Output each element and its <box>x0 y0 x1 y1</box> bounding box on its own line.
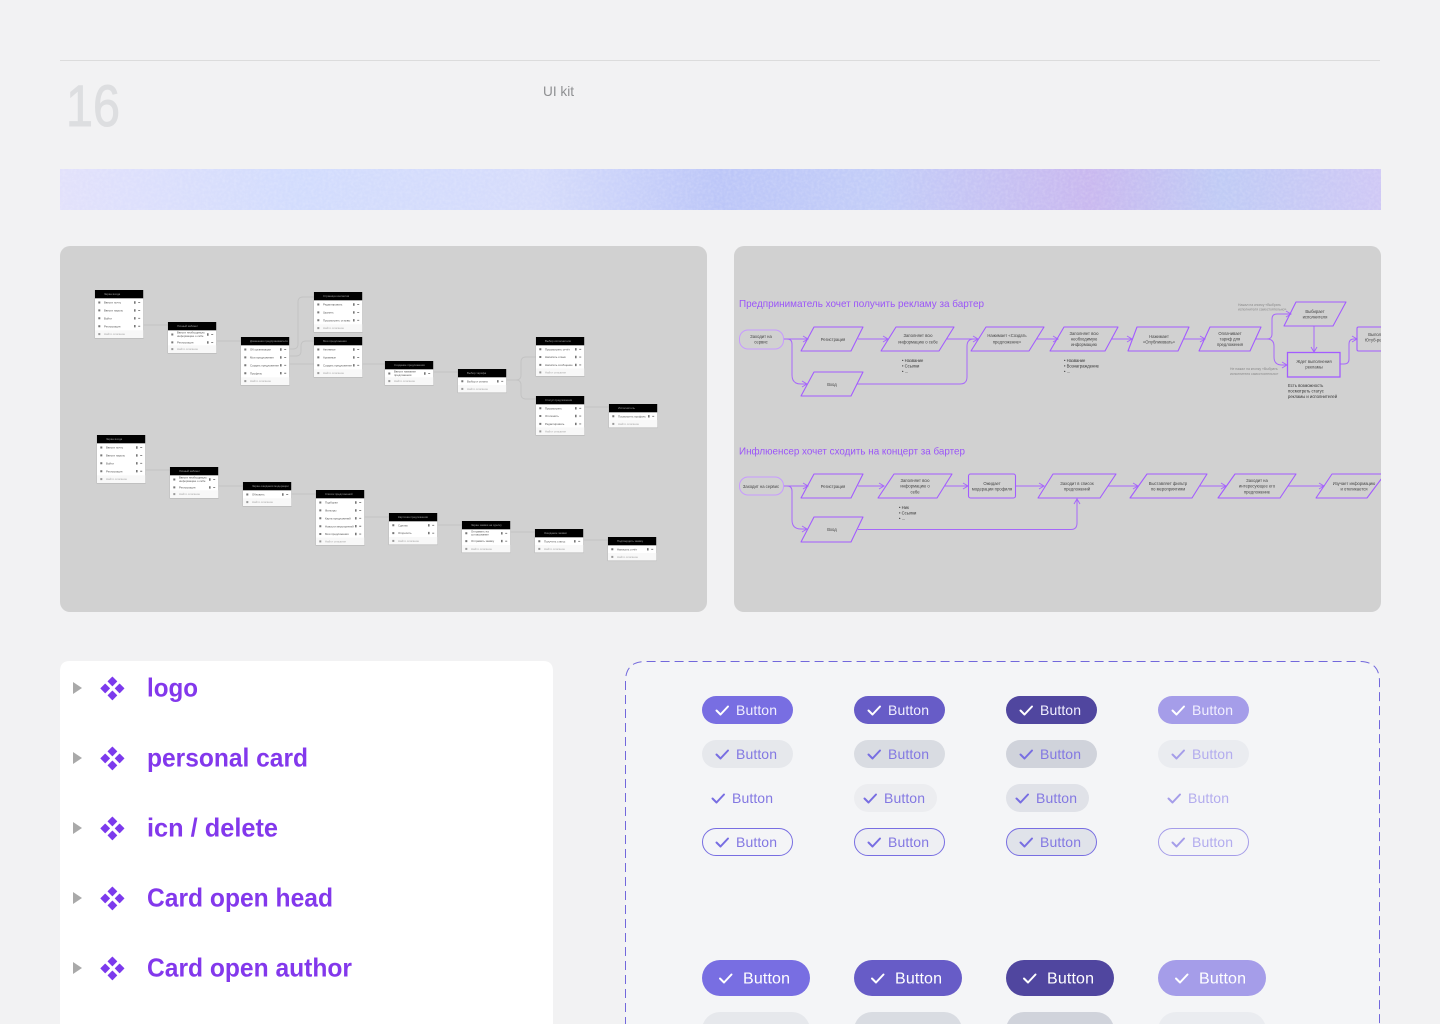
button row: filled small: Button <box>1192 702 1233 718</box>
card: login: Регистрация <box>104 324 121 328</box>
step: visits service <box>740 330 784 349</box>
step: login flow 1 <box>801 372 863 396</box>
card: login 2 <box>97 435 146 484</box>
step: interesting offer: Заходит на <box>1246 478 1268 483</box>
step: performs <box>1356 326 1381 352</box>
card: offer card <box>389 513 438 545</box>
note: required list: • ... <box>1064 369 1070 374</box>
step: interesting offer: интересующее его <box>1239 484 1276 488</box>
card: create offer: Создание предложения <box>394 363 425 367</box>
card: contractor <box>609 404 658 428</box>
button row: filled small: Button <box>1040 702 1081 718</box>
step: awaits moderation: Ожидает <box>983 481 1001 486</box>
card: login: Ввести пароль <box>104 308 124 312</box>
card: login 2: Войти <box>106 461 114 465</box>
card: tariff: Выбор и оплата <box>467 379 488 383</box>
card: offer card: Открепить <box>398 531 412 535</box>
card: personal info: Личный кабинет <box>177 324 199 328</box>
card: deal: согласование <box>471 533 489 537</box>
connectors <box>143 297 609 540</box>
note: fields list: • Название <box>902 358 924 363</box>
step: fill info <box>881 327 954 351</box>
step: wait ads <box>1288 352 1340 377</box>
note: fields list: • Ссылки <box>902 364 920 368</box>
card: my offers: Создать предложение <box>323 363 352 367</box>
card: offers list: Список предложений <box>325 492 353 496</box>
button row: filled large: Button <box>1047 970 1094 988</box>
card: business: Мои предложения <box>250 356 274 360</box>
card: personal info: информацию о себе <box>177 334 204 338</box>
step: visits service: Заходит на <box>750 334 772 339</box>
card: influencer home: Обновить <box>252 493 265 497</box>
flow title: entrepreneur: Предприниматель хочет получить рекламу за бартер <box>739 298 984 310</box>
note: fields list <box>902 359 924 373</box>
card: contractor selection: Просмотреть отчёт <box>545 347 571 351</box>
step: registration: Регистрация <box>821 337 845 342</box>
card: offer status: Отклонить <box>545 414 559 418</box>
card: login: Экран входа <box>104 292 121 296</box>
step: choose contractor: исполнителя <box>1303 314 1327 320</box>
note: required list: • Название <box>1064 358 1086 363</box>
step: fill required <box>1050 327 1118 351</box>
step: fill info: Заполняет всю <box>900 478 930 483</box>
card: my offers: Архивные <box>323 356 336 360</box>
card: personal info: Ввести необходимую <box>177 331 205 335</box>
card: my offers: Найти описание <box>323 371 344 375</box>
step: performs: Выполняет <box>1368 332 1390 337</box>
card: offers list <box>316 490 365 546</box>
card: contacts: Просмотреть отзывы <box>323 318 350 322</box>
card: personal info 2: Ввести необходимую <box>179 476 207 480</box>
card: tariff <box>458 369 507 393</box>
card: contractor selection: Выбор исполнителя <box>545 339 571 343</box>
card: offers list: Карта предложений <box>325 516 351 520</box>
note: button not pressed: Не нажал на кнопку «Выбрать <box>1230 367 1278 371</box>
step: visits service: сервис <box>754 340 768 344</box>
card: result: Подтвердить заявку <box>617 539 644 543</box>
card: create offer: предложения <box>394 373 412 377</box>
button row: tinted small: Button <box>736 746 777 762</box>
step: interesting offer: предложение <box>1244 490 1271 494</box>
step: interesting offer <box>1218 474 1296 498</box>
row: Card open head <box>73 882 333 912</box>
card: business <box>241 337 290 386</box>
card: login 2: Ввести пароль <box>106 454 126 458</box>
step: pay: тариф для <box>1220 336 1240 342</box>
card: my offers: Активные <box>323 348 336 352</box>
step: fill required: Заполняет всю <box>1069 331 1099 336</box>
card: deal: Отправить заявку <box>471 539 495 543</box>
step: filter: по мероприятиям <box>1151 486 1185 492</box>
note: required list <box>1064 359 1099 373</box>
step: visits service <box>740 477 784 495</box>
row: logo <box>73 672 198 702</box>
card: offer card: Сделка <box>398 523 408 527</box>
step: opens list: Заходит в список <box>1060 481 1094 486</box>
card: create offer <box>385 361 434 386</box>
card: my offers: Мои предложения <box>323 339 347 343</box>
step: fill info <box>878 474 952 498</box>
step: publish: «Опубликовать» <box>1143 340 1176 344</box>
card: login: Ввести почту <box>104 301 122 305</box>
card: offer status <box>536 396 585 436</box>
step: registration <box>801 327 863 351</box>
note: status: посмотреть статус <box>1288 388 1324 394</box>
button row: outline small: Button <box>1040 834 1081 850</box>
note: profile list <box>899 506 916 520</box>
step: studies info: и откликается <box>1340 486 1368 492</box>
card: contractor: Посмотреть профиль <box>618 414 646 418</box>
button row: ghost small: Button <box>884 790 925 806</box>
card: contacts: Редактировать <box>323 303 343 307</box>
row: icn / delete <box>73 812 278 842</box>
step: create offer: Нажимает «Создать <box>987 333 1027 338</box>
card: tariff: Найти описание <box>467 387 488 391</box>
card: influencer home: Найти описание <box>252 500 273 504</box>
card: personal info 2: Личный кабинет <box>179 469 201 473</box>
card: business: Найти описание <box>250 379 271 383</box>
step: publish: Нажимает <box>1149 334 1169 339</box>
card: contractor selection <box>536 337 585 377</box>
row: icn / delete: icn / delete <box>147 812 278 842</box>
step: login: Вход <box>827 527 837 532</box>
card: login: Войти <box>104 316 112 320</box>
card: personal info 2: Найти описание <box>179 492 200 496</box>
note: fields list: • ... <box>902 369 908 374</box>
note: required list: • Вознаграждение <box>1064 364 1100 368</box>
card: login 2: Экран входа <box>106 437 123 441</box>
step: pay: предложения <box>1217 342 1243 347</box>
card: contractor selection: Написать сообщение <box>545 363 573 367</box>
panel: button states <box>626 662 1380 1024</box>
panel: layers list <box>60 661 553 1024</box>
note: button not pressed: исполнителя самостоятельно» <box>1230 372 1279 376</box>
card: offer status: Статус предложения <box>545 398 573 402</box>
card: contractor selection: Найти описание <box>545 370 566 374</box>
step: fill required: информацию <box>1071 342 1097 347</box>
top divider <box>60 60 1380 61</box>
step: studies info: Изучает информацию <box>1333 481 1375 486</box>
card: offers list: Мои предложения <box>325 532 349 536</box>
step: fill info: информацию о <box>900 484 930 488</box>
button row: tinted small: Button <box>1040 746 1081 762</box>
flow title: influencer: Инфлюенсер хочет сходить на концерт за бартер <box>739 446 965 458</box>
card: result: Найти описание <box>617 555 638 559</box>
panel: user flows <box>734 246 1397 612</box>
card: create offer: Найти описание <box>394 379 415 383</box>
step: create offer: предложение» <box>993 340 1022 344</box>
button row: filled large: Button <box>1199 970 1246 988</box>
step: choose contractor <box>1284 302 1346 326</box>
step: create offer <box>971 327 1044 351</box>
card: business: Создать предложение <box>250 363 279 367</box>
card: login 2: Найти описание <box>106 477 127 481</box>
card: influencer home <box>243 482 292 507</box>
card: contacts: Страница контактов <box>323 294 350 298</box>
step: filter <box>1130 474 1207 498</box>
step: wait ads: Ждет выполнения <box>1296 359 1332 364</box>
row: logo: logo <box>147 672 198 702</box>
button row: filled large: Button <box>743 970 790 988</box>
step: registration: Регистрация <box>821 484 845 489</box>
card: contacts: Удалить <box>323 310 334 314</box>
step: pay: Оплачивает <box>1218 331 1242 336</box>
note: button pressed: Нажал на кнопку «Выбрать <box>1238 303 1281 307</box>
section title: UI kit <box>543 83 574 99</box>
step: awaits moderation: модерации профиля <box>972 486 1012 492</box>
row: personal card <box>73 742 308 772</box>
button row: filled small: Button <box>888 702 929 718</box>
card: offer card: Карточка предложения <box>398 515 428 519</box>
card: contractor: Найти описание <box>618 422 639 426</box>
card: contacts <box>314 292 363 333</box>
step: registration <box>801 474 863 498</box>
card: wait <box>535 529 584 553</box>
card: deal: Отправить на <box>471 530 489 534</box>
card: business: Домашняя предпринимателя <box>250 339 288 343</box>
card: offers list: Новости мероприятий <box>325 524 354 528</box>
card: result <box>608 537 657 561</box>
step: wait ads: рекламы <box>1305 364 1323 370</box>
button row: filled small: Button <box>736 702 777 718</box>
card: offer status: Найти описание <box>545 430 566 434</box>
step: choose contractor: Выбирает <box>1305 309 1325 314</box>
button row: outline small: Button <box>736 834 777 850</box>
card: wait: Найти описание <box>544 547 565 551</box>
card: personal info <box>168 322 217 354</box>
button row: filled small <box>702 696 1249 724</box>
button row: tinted small: Button <box>1192 746 1233 762</box>
card: login <box>95 290 144 339</box>
card: offer card: Найти описание <box>398 539 419 543</box>
card: contractor: Исполнитель <box>618 406 636 410</box>
step: opens list <box>1038 474 1116 498</box>
step: awaits moderation <box>968 474 1016 498</box>
note: profile list: • Ник <box>899 505 909 510</box>
step: fill info: себе <box>910 490 920 494</box>
card: login: Найти описание <box>104 332 125 336</box>
card: create offer: Ввести название <box>394 370 416 374</box>
button row: filled large: Button <box>895 970 942 988</box>
note: button pressed <box>1238 303 1286 310</box>
card: offers list: Фильтры <box>325 508 336 512</box>
button row: outline small: Button <box>1192 834 1233 850</box>
row: Card open head: Card open head <box>147 882 333 912</box>
card: login 2: Регистрация <box>106 469 123 473</box>
card: offer status: Просмотреть <box>545 406 563 410</box>
step: login flow 1: Вход <box>827 382 837 387</box>
step: studies info <box>1316 474 1385 498</box>
note: profile list: • Ссылки <box>899 510 917 516</box>
button row: filled large <box>702 960 1266 996</box>
button row: ghost small <box>712 784 1229 812</box>
note: profile list: • ... <box>899 516 905 521</box>
note: button pressed: исполнителя самостоятельно» <box>1238 308 1287 312</box>
step: opens list: предложений <box>1064 486 1091 492</box>
note: status: рекламы и исполнителей <box>1288 394 1338 399</box>
button row: ghost small: Button <box>732 790 773 806</box>
step: visits service: Заходит на сервис <box>743 484 779 489</box>
note: button not pressed <box>1230 367 1278 375</box>
card: contractor selection: Написать отзыв <box>545 355 566 359</box>
card: personal info: Регистрация <box>177 340 194 344</box>
step: fill info: Заполняет всю <box>903 333 933 338</box>
button row: ghost small: Button <box>1036 790 1077 806</box>
button row: tinted small <box>702 740 1249 768</box>
step: pay <box>1199 327 1261 351</box>
button row: outline small <box>702 828 1248 856</box>
button row: outline small: Button <box>888 834 929 850</box>
card: my offers <box>314 337 363 378</box>
step: login <box>801 517 863 542</box>
button row: tinted small: Button <box>888 746 929 762</box>
card: login 2: Ввести почту <box>106 446 124 450</box>
card: offer status: Редактировать <box>545 422 565 426</box>
card: business: Об организации <box>250 348 271 352</box>
step: publish <box>1128 327 1189 351</box>
flow 1 connectors <box>783 311 1357 387</box>
card: personal info 2: информацию о себе <box>179 479 206 483</box>
card: deal: Найти описание <box>471 547 492 551</box>
card: deal <box>462 521 511 553</box>
card: personal info: Найти описание <box>177 347 198 351</box>
step: filter: Выставляет фильтр <box>1149 481 1188 486</box>
note: status: Есть возможность <box>1288 383 1324 388</box>
panel: navigation map <box>60 246 707 612</box>
card: contacts: Найти описание <box>323 326 344 330</box>
row: Card open author: Card open author <box>147 952 352 982</box>
card: offers list: Найти описание <box>325 540 346 544</box>
step: fill required: необходимую <box>1071 336 1097 342</box>
note: status <box>1288 383 1338 399</box>
card: wait: Ожидание заявки <box>544 531 567 535</box>
card: personal info 2 <box>170 467 219 499</box>
card: business: Профиль <box>250 371 263 375</box>
step: performs: Ютуб-рекламу <box>1365 338 1394 342</box>
card: influencer home: Экран ожидания модерации <box>252 484 289 488</box>
card: offers list: Подборки <box>325 501 338 505</box>
card: personal info 2: Регистрация <box>179 486 196 490</box>
step: fill info: информацию о себе <box>898 340 938 344</box>
row: personal card: personal card <box>147 742 308 772</box>
button row: ghost small: Button <box>1188 790 1229 806</box>
button row: tinted large <box>702 1012 1266 1024</box>
card: wait: Получить статус <box>544 539 566 543</box>
flow 2 connectors <box>783 483 1324 532</box>
card: tariff: Выбор тарифа <box>467 371 487 375</box>
section number: 16 <box>66 74 120 139</box>
card: result: Написать отчёт <box>617 547 638 551</box>
card: deal: Экран заявки на сделку <box>471 523 502 527</box>
gradient band <box>60 169 1381 210</box>
